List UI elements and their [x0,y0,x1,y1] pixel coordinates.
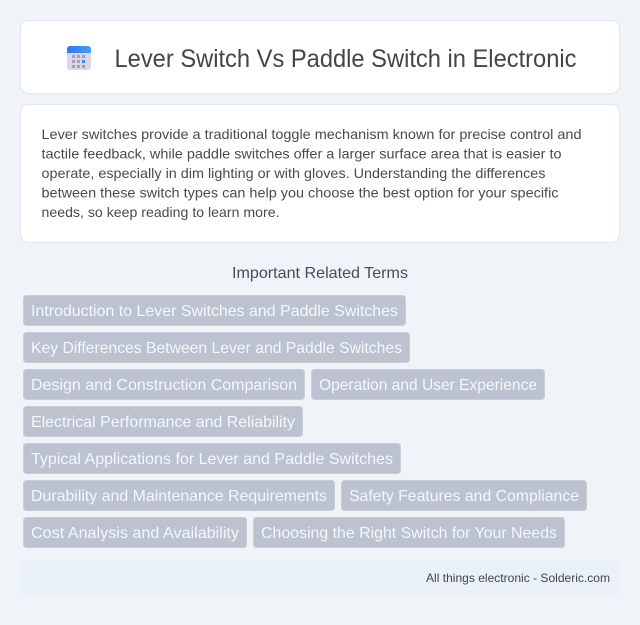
term chips [24,296,586,548]
text block: description: tactile feedback, while paddle switches offer a larger surface area that is easier to [42,146,562,162]
footer [20,561,620,595]
chip: safety: Safety Features and Compliance [349,488,579,505]
chip: operation: Operation and User Experience [319,377,537,394]
text block: description: operate, especially in dim lighting or with gloves. Understanding the differences [42,165,546,181]
chip: electrical: Electrical Performance and Reliability [31,414,295,431]
chip: design [24,370,304,400]
text block: description: Lever switches provide a traditional toggle mechanism known for precise control and [42,126,582,142]
chip: safety [342,480,586,510]
heading: related terms: Important Related Terms [232,265,408,282]
chip: applications [24,444,400,474]
chip: key differences [24,332,410,362]
text block: description [42,126,582,220]
text block: description: between these switch types can help you choose the best option for your specific [42,184,558,200]
panel: header [20,20,620,94]
footer: All things electronic - Solderic.com [426,571,610,585]
panel: description [20,104,620,242]
chip: choosing: Choosing the Right Switch for Your Needs [261,525,557,542]
chip: introduction [24,296,406,326]
chip: electrical [24,406,302,436]
chip: durability: Durability and Maintenance Requirements [31,488,327,505]
chip: cost [24,518,246,548]
text block: description: needs, so keep reading to learn more. [42,204,280,220]
icon: calendar [67,46,91,70]
chip: applications: Typical Applications for Lever and Paddle Switches [31,451,393,468]
title: Lever Switch Vs Paddle Switch in Electronic [114,45,576,73]
chip: design: Design and Construction Comparison [31,377,297,394]
chip: choosing [254,518,564,548]
chip: cost: Cost Analysis and Availability [31,525,239,542]
chip: durability [24,480,334,510]
chip: key differences: Key Differences Between Lever and Paddle Switches [31,340,402,357]
chip: operation [312,370,544,400]
chip: introduction: Introduction to Lever Switches and Paddle Switches [31,303,398,320]
